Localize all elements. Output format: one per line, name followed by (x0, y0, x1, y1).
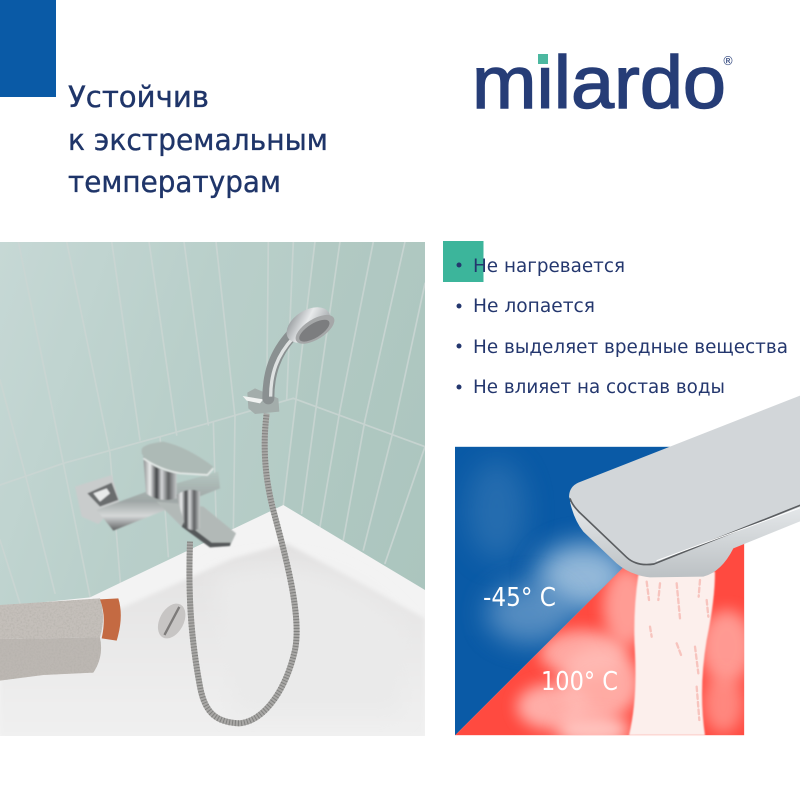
title (68, 80, 328, 199)
title: Устойчив (68, 80, 209, 114)
teal accent square (443, 241, 484, 282)
bullets (456, 262, 462, 390)
temperature panel (455, 394, 800, 747)
photo: bath mixer and shower (0, 240, 425, 737)
hot triangle (455, 544, 744, 736)
towels (0, 598, 121, 681)
logo: milardo: ® (722, 54, 734, 68)
title: температурам (68, 165, 281, 199)
list text: Не лопается (473, 295, 595, 317)
title: к экстремальным (68, 123, 328, 157)
list text (473, 255, 788, 398)
bath tub (0, 505, 425, 737)
label: hot temperature: 100° C (541, 667, 618, 697)
label: cold temperature: -45° C (483, 583, 556, 613)
water stream (629, 572, 715, 735)
logo: milardo: milardo (472, 41, 726, 124)
cold triangle (455, 446, 670, 736)
wall mixer (75, 442, 236, 547)
list text: Не выделяет вредные вещества (473, 336, 788, 358)
overflow drain (158, 604, 186, 638)
blue corner square (0, 0, 56, 97)
chrome spout (569, 394, 800, 577)
flexible hose (189, 413, 297, 723)
bullet list (443, 241, 788, 398)
list text: Не нагревается (473, 255, 625, 277)
shower handle and head (268, 300, 339, 398)
list text: Не влияет на состав воды (473, 376, 725, 398)
shower holder (243, 388, 279, 414)
